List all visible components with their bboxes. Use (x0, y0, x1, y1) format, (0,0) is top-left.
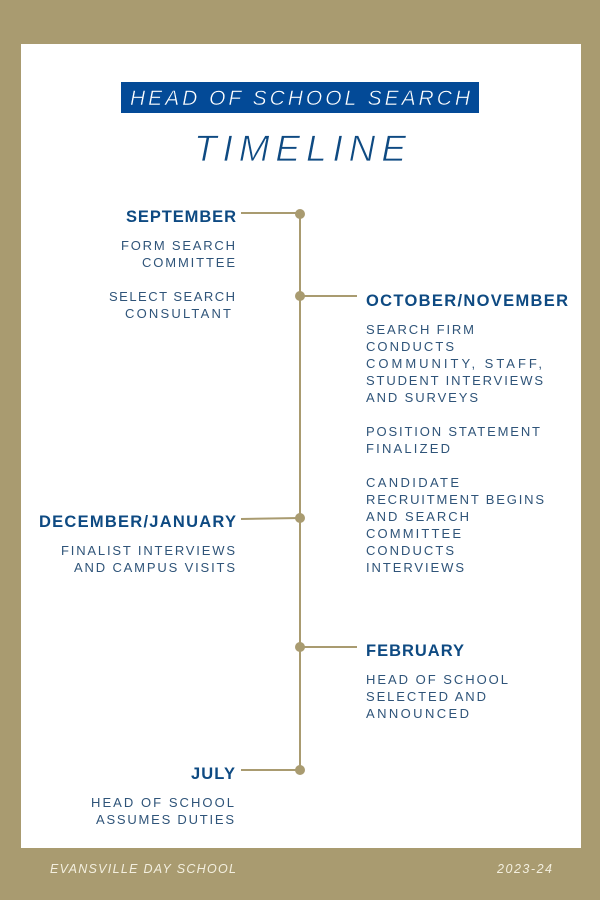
milestone: July: JULY (191, 765, 235, 783)
milestone: December/January: AND CAMPUS VISITS (74, 560, 235, 575)
milestone: September: SELECT SEARCH (109, 289, 235, 304)
milestone: September: SEPTEMBER (126, 208, 236, 226)
timeline spine with markers (241, 209, 357, 775)
milestone: September: COMMITTEE (142, 255, 235, 270)
milestone: December/January: FINALIST INTERVIEWS (61, 543, 235, 558)
milestone: October/November: CONDUCTS (366, 339, 454, 354)
milestone: October/November: STUDENT INTERVIEWS (366, 373, 543, 388)
milestone: October/November: CANDIDATE (366, 475, 459, 490)
milestone: September (109, 208, 236, 321)
milestone: October/November: AND SURVEYS (366, 390, 478, 405)
milestone: July: HEAD OF SCHOOL (91, 795, 234, 810)
milestone: February: ANNOUNCED (366, 706, 469, 721)
milestone: September: CONSULTANT (125, 306, 231, 321)
milestone: February: FEBRUARY (366, 642, 464, 660)
milestone: October/November: POSITION STATEMENT (366, 424, 540, 439)
title banner: head of school search: HEAD OF SCHOOL SEARCH (130, 87, 471, 110)
milestone: October/November: COMMITTEE (366, 526, 461, 541)
milestone: October/November: CONDUCTS (366, 543, 454, 558)
milestone: February (366, 642, 508, 721)
footer: year: 2023-24 (496, 862, 552, 876)
milestone: December/January: DECEMBER/JANUARY (39, 513, 236, 531)
milestone: October/November: FINALIZED (366, 441, 450, 456)
milestone: February: HEAD OF SCHOOL (366, 672, 508, 687)
milestone: October/November: INTERVIEWS (366, 560, 464, 575)
milestone: September: FORM SEARCH (121, 238, 235, 253)
milestone: October/November (366, 292, 568, 575)
milestone: July: ASSUMES DUTIES (96, 812, 234, 827)
milestone: December/January (39, 513, 236, 575)
milestone: February: SELECTED AND (366, 689, 486, 704)
title: timeline: TIMELINE (194, 128, 407, 169)
milestone: October/November: OCTOBER/NOVEMBER (366, 292, 568, 310)
milestone: October/November: SEARCH FIRM (366, 322, 474, 337)
milestone: October/November: COMMUNITY, STAFF, (366, 356, 542, 371)
milestone: October/November: AND SEARCH (366, 509, 469, 524)
milestone: October/November: RECRUITMENT BEGINS (366, 492, 544, 507)
footer: school name: EVANSVILLE DAY SCHOOL (50, 862, 236, 876)
milestone: July (91, 765, 235, 827)
